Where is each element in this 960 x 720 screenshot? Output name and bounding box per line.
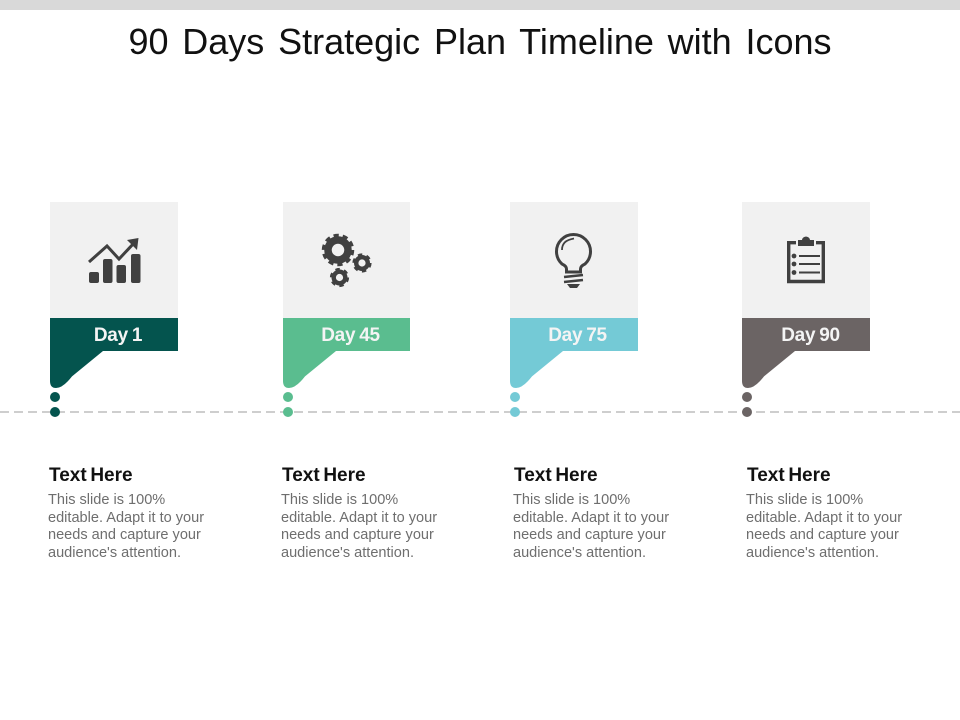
icon card: day 75 — [510, 202, 638, 318]
day 1 text block: audience's attention. — [48, 545, 181, 561]
day 75 text block: editable. Adapt it to your — [513, 510, 669, 526]
day 1 text block: This slide is 100% — [48, 492, 165, 508]
icon card: day 90 — [742, 202, 870, 318]
day 45 label: Day 45 — [321, 325, 380, 346]
day 90 text block: editable. Adapt it to your — [746, 510, 902, 526]
day 75 text block — [513, 465, 669, 561]
day 45 timeline dots — [283, 392, 293, 417]
day 90 label: Day 90 — [781, 325, 840, 346]
day 1 text block: Text Here — [49, 465, 133, 486]
icon: growth chart — [89, 238, 140, 283]
day 45 text block — [281, 465, 437, 561]
day 75 label: Day 75 — [548, 325, 607, 346]
day 75 flag — [510, 318, 638, 388]
day 45 text block: audience's attention. — [281, 545, 414, 561]
day 1 text block: editable. Adapt it to your — [48, 510, 204, 526]
day 75 timeline dots — [510, 392, 520, 417]
day 45 text block: needs and capture your — [281, 527, 434, 543]
icon: gears — [324, 236, 370, 286]
panel: day 90 — [742, 202, 902, 561]
day 75 text block: audience's attention. — [513, 545, 646, 561]
day 90 text block: needs and capture your — [746, 527, 899, 543]
icon: clipboard — [789, 237, 823, 282]
day 1 text block — [48, 465, 204, 561]
day 45 text block: Text Here — [282, 465, 366, 486]
day 45 text block: editable. Adapt it to your — [281, 510, 437, 526]
icon: light bulb — [557, 234, 590, 288]
day 75 text block: This slide is 100% — [513, 492, 630, 508]
panel: day 1 — [48, 202, 204, 561]
day 90 text block — [746, 465, 902, 561]
day 90 text block: Text Here — [747, 465, 831, 486]
day 1 flag — [50, 318, 178, 388]
day 75 text block: Text Here — [514, 465, 598, 486]
icon card: day 1 — [50, 202, 178, 318]
panel: day 75 — [510, 202, 669, 561]
top bar — [0, 0, 960, 10]
day 1 text block: needs and capture your — [48, 527, 201, 543]
day 45 text block: This slide is 100% — [281, 492, 398, 508]
panel: day 45 — [281, 202, 437, 561]
day 75 text block: needs and capture your — [513, 527, 666, 543]
day 1 label: Day 1 — [94, 325, 143, 346]
icon card: day 45 — [283, 202, 410, 318]
day 45 flag — [283, 318, 410, 388]
day 90 flag — [742, 318, 870, 388]
title: 90 Days Strategic Plan Timeline with Icons — [128, 21, 832, 62]
day 90 text block: audience's attention. — [746, 545, 879, 561]
day 90 text block: This slide is 100% — [746, 492, 863, 508]
day 1 timeline dots — [50, 392, 60, 417]
day 90 timeline dots — [742, 392, 752, 417]
